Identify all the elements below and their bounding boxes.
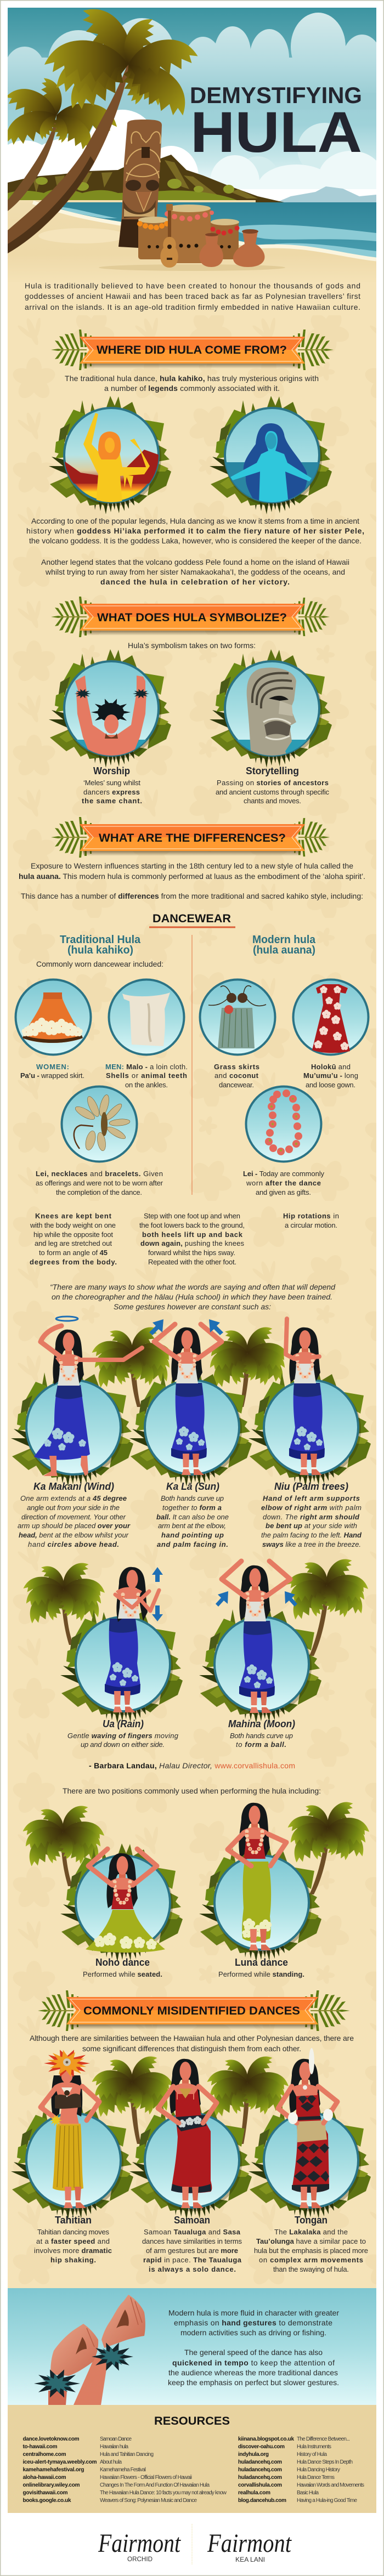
lei caption modern: worn after the dance <box>246 1179 321 1187</box>
arrows: sun gesture <box>149 1319 223 1335</box>
intro paragraph: goddesses of ancient Hawaii and has been traced back as far as Polynesian travellers’ first <box>25 292 360 300</box>
worship caption <box>82 765 142 805</box>
resources list left: books.google.co.uk <box>23 2498 71 2504</box>
distant mountains <box>276 186 376 202</box>
dancewear captions row one <box>20 1063 358 1089</box>
arrows: moon gesture <box>216 1591 297 1607</box>
resources list right: Basic Hula <box>297 2490 319 2496</box>
oval: grass skirt and coconuts <box>200 979 275 1055</box>
dancer: Tongan <box>249 2048 371 2220</box>
resources list right: huladancehq.com <box>238 2475 282 2481</box>
positions intro: There are two positions commonly used when performing the hula including: <box>63 1786 321 1795</box>
tahitian caption: Tahitian dancing moves <box>37 2228 110 2236</box>
lei caption traditional: as offerings and were not to be worn after <box>36 1179 163 1187</box>
resources list left: Hula and Tahitian Dancing <box>100 2452 154 2458</box>
banner: what are the differences <box>51 817 330 858</box>
noho caption: Noho dance <box>95 1957 150 1968</box>
movement column one: degrees from the body. <box>30 1258 117 1266</box>
resources list left: dance.lovetoknow.com <box>23 2436 80 2442</box>
intro paragraph <box>25 281 360 311</box>
wind caption: Ka Makani (Wind) <box>33 1481 114 1492</box>
banner: commonly misidentified dances <box>38 1990 350 2031</box>
quote <box>50 1283 336 1311</box>
dancewear captions row one: and loose gown. <box>306 1081 355 1089</box>
wind caption: One arm extends at a 45 degree <box>20 1494 127 1502</box>
resources heading: RESOURCES <box>154 2415 230 2427</box>
traditional hula heading: (hula kahiko) <box>67 944 133 956</box>
movement column two: the foot lowers back to the ground, <box>139 1221 245 1229</box>
title: HULA <box>190 100 362 164</box>
clay gourds <box>199 229 265 267</box>
legends paragraph two: danced the hula in celebration of her victory. <box>100 577 290 586</box>
large palm tree <box>8 0 200 253</box>
quote: on the choreographer and the hālau (Hula school) in which they have been trained. <box>52 1292 332 1301</box>
samoan caption: is always a solo dance. <box>149 2265 236 2273</box>
misidentified intro text: Although there are similarities between the Hawaiian hula and other Polynesian dances, there are <box>30 2034 354 2042</box>
legends paragraph two <box>41 558 349 586</box>
sun caption: arm bent at the elbow, <box>158 1522 226 1530</box>
dancewear captions row one: Holokū and <box>311 1063 351 1071</box>
worship caption: dancers express <box>83 788 140 796</box>
intro paragraph: Hula is traditionally believed to have been created to honour the thousands of gods and <box>25 281 360 290</box>
beach sand <box>8 202 376 270</box>
sun caption <box>156 1481 229 1548</box>
movement column two: Repeated with the other foot. <box>148 1258 236 1266</box>
resources list right: huladancehq.com <box>238 2467 282 2473</box>
banner: what does hula symbolize: WHAT DOES HULA SYMBOLIZE? <box>97 611 287 624</box>
resources list left: onlinelibrary.wiley.com <box>23 2482 80 2488</box>
banner: where did hula come from <box>51 330 334 370</box>
illustration: hand gestures <box>34 2295 145 2405</box>
oval: worship figure <box>49 649 171 768</box>
dancewear heading: DANCEWEAR <box>153 912 231 925</box>
samoan caption: of arm gestures but are more <box>146 2246 238 2255</box>
banner: what does hula symbolize <box>51 597 330 637</box>
logo divider <box>191 2524 193 2565</box>
lei caption modern: Lei - Today are commonly <box>243 1170 325 1178</box>
traditional hula heading <box>60 934 141 956</box>
lei caption traditional: Lei, necklaces and bracelets. Given <box>36 1170 163 1178</box>
palm trees caption <box>261 1481 362 1548</box>
legends paragraph two: Another legend states that the volcano goddess Pele found a home on the island of Hawaii <box>41 558 349 566</box>
dancewear captions row one: Mu’umu’u - long <box>303 1071 358 1080</box>
luna caption: Performed while standing. <box>218 1970 304 1978</box>
logo: Fairmont Kea Lani: KEA LANI <box>235 2556 265 2563</box>
luna caption <box>218 1957 304 1978</box>
dancewear captions row one: Grass skirts <box>214 1063 259 1071</box>
intro paragraph: arrival on the islands. It is an age-old tradition firmly embedded in native Hawaiian culture. <box>25 303 360 311</box>
resources list left: centralhome.com <box>23 2452 66 2458</box>
palm trees behind positions <box>21 1796 371 1894</box>
movement column three <box>283 1212 339 1229</box>
wind caption: direction of movement. Your other <box>21 1513 126 1521</box>
dancer: Mahina <box>199 1561 321 1723</box>
logo: Fairmont Orchid: ORCHID <box>127 2555 153 2563</box>
resources list left: iceu-alert-tymaya.weebly.com <box>23 2459 97 2465</box>
oval: goddess Laka <box>210 396 332 514</box>
movement column two: both heels lift up and back <box>142 1230 243 1239</box>
worship caption: ‘Meles’ sung whilst <box>83 779 140 787</box>
wind caption <box>18 1481 131 1548</box>
samoan caption: dances have similarities in terms <box>142 2237 242 2245</box>
palm trees behind polynesian dancers <box>91 2051 290 2144</box>
movement column two <box>139 1212 245 1266</box>
dancewear captions row one: Pa’u - wrapped skirt. <box>20 1071 84 1080</box>
diamond head mountain <box>8 155 284 202</box>
storytelling caption: Storytelling <box>246 765 299 776</box>
modern hula text: emphasis on hand gestures to demonstrate <box>174 2318 332 2327</box>
resources list right: Hula Dance Terms <box>297 2475 335 2481</box>
resources list right: realhula.com <box>238 2490 270 2496</box>
misidentified intro text: some significant differences that distinguish them from each other. <box>82 2044 301 2053</box>
oval: holoku dress <box>293 979 369 1055</box>
modern hula text: Modern hula is more fluid in character with greater <box>168 2308 339 2317</box>
modern hula text: modern activities such as driving or fishing. <box>180 2328 326 2337</box>
resources list left: Hawaiian Flowers - Official Flowers of Hawaii <box>100 2475 192 2481</box>
wind caption: head, bent at the elbow whilst your <box>19 1531 129 1539</box>
tongan caption: than the swaying of hula. <box>273 2265 349 2273</box>
misidentified intro text <box>30 2034 354 2053</box>
sun caption: Ka Lā (Sun) <box>166 1481 219 1492</box>
rain caption <box>67 1718 179 1749</box>
differences intro text: hula auana. This modern hula is commonly performed at luaus as the embodiment of the ‘aloha spirit’. <box>19 872 365 881</box>
lei caption modern: and given as gifts. <box>256 1188 311 1196</box>
drums with flower garlands <box>137 205 239 263</box>
resources list right: discover-oahu.com <box>238 2444 285 2450</box>
resources list left: Hawaiian hula <box>100 2444 128 2450</box>
tongan caption: hula but the emphasis is placed more <box>254 2246 368 2255</box>
dancer: Ua <box>60 1567 183 1723</box>
legends paragraph two: whilst trying to run away from her sister Namakaokaha’I, the goddess of the oceans, and <box>45 568 345 576</box>
oval: pau skirt <box>15 979 91 1055</box>
legends paragraph one: the volcano goddess. It is the goddess Laka, however, who is considered the keeper of the dance. <box>29 536 362 545</box>
resources list left: About hula <box>100 2459 122 2465</box>
palm trees behind gesture dancers <box>91 1321 290 1407</box>
panel: modern hula blue band <box>8 2288 376 2405</box>
resources list right: indyhula.org <box>238 2452 269 2458</box>
resources list right: Hawaiian Words and Movements <box>297 2482 364 2488</box>
legends paragraph one <box>26 517 364 545</box>
modern hula text: quickened in tempo to keep the attention of <box>172 2358 335 2367</box>
movement column two: down again, pushing the knees <box>140 1239 245 1247</box>
quote attribution: - Barbara Landau, Halau Director, www.corvallishula.com <box>89 1761 295 1770</box>
movement column three: Hip rotations in <box>283 1212 339 1220</box>
sun caption: Both hands curve up <box>161 1494 224 1502</box>
resources list right: Having a Hula-ing Good Time <box>297 2498 357 2504</box>
worship caption: the same chant. <box>82 797 142 805</box>
resources list left: Weavers of Song: Polynesian Music and Dance <box>100 2498 197 2504</box>
resources list right: corvallishula.com <box>238 2482 282 2488</box>
palm trees caption: sways like a tree in the breeze. <box>262 1540 361 1548</box>
movement column one: and leg are stretched out <box>35 1239 112 1247</box>
dancewear captions row one: on the ankles. <box>125 1081 168 1089</box>
dancewear captions row one: and coconut <box>214 1071 259 1080</box>
worship caption: Worship <box>93 765 130 776</box>
resources list right: Hula Instruments <box>297 2444 331 2450</box>
movement column one: to form an angle of 45 <box>39 1249 108 1257</box>
banner: commonly misidentified dances: COMMONLY MISIDENTIFIED DANCES <box>83 2005 300 2017</box>
resources list left: Changes In The Form And Function Of Hawaiian Hula <box>100 2482 210 2488</box>
tongan caption <box>254 2215 368 2273</box>
tongan caption: Tongan <box>295 2215 327 2226</box>
moon caption: Mahina (Moon) <box>228 1718 295 1729</box>
banner: where did hula come from: WHERE DID HULA COME FROM? <box>97 344 287 356</box>
moon caption: to form a ball. <box>236 1740 286 1749</box>
legends intro text: a number of legends commonly associated with it. <box>104 384 280 393</box>
column divider <box>192 935 193 1195</box>
dancewear captions row one: WOMEN: <box>36 1063 69 1071</box>
oval: flower lei <box>246 1087 321 1161</box>
palm trees caption: be bent up at your side with <box>266 1522 357 1530</box>
storytelling caption <box>216 765 329 805</box>
symbolism intro: Hula’s symbolism takes on two forms: <box>128 641 256 650</box>
dancewear intro: Commonly worn dancewear included: <box>36 960 163 968</box>
samoan caption: Samoan <box>174 2215 210 2226</box>
tiki statue <box>118 120 162 248</box>
movement column one <box>30 1212 117 1266</box>
resources list right <box>238 2436 364 2504</box>
tongan caption: Tau’olunga have a similar pace to <box>256 2237 366 2245</box>
movement column two: forward whilst the hips sway. <box>148 1249 235 1257</box>
differences intro text: Exposure to Western influences starting in the 18th century led to a new style of hula called the <box>31 861 353 870</box>
palm trees caption: down. The right arm should <box>263 1513 360 1521</box>
lei caption traditional <box>36 1170 163 1196</box>
sun caption: together to form a <box>162 1503 222 1512</box>
modern hula text: the audience whereas the more traditional dances <box>168 2368 338 2377</box>
dancer: Noho <box>60 1843 183 1962</box>
dancewear captions row one: MEN: Malo - a loin cloth. <box>105 1063 188 1071</box>
storytelling caption: chants and moves. <box>244 797 301 805</box>
resources list left: kamehamehafestival.org <box>23 2467 84 2473</box>
banner: what are the differences: WHAT ARE THE DIFFERENCES? <box>99 832 286 844</box>
noho caption <box>83 1957 162 1978</box>
hero illustration <box>8 8 376 271</box>
patterned page body <box>8 258 376 2288</box>
legends paragraph one: According to one of the popular legends, Hula dancing as we know it stems from a time in ancient <box>31 517 359 525</box>
modern hula heading <box>252 934 316 956</box>
tahitian caption <box>34 2215 112 2264</box>
palm trees caption: Niu (Palm trees) <box>274 1481 348 1492</box>
arrows: rain up and down <box>152 1567 163 1621</box>
sun caption: ball. It can also be one <box>156 1513 229 1521</box>
title: DEMYSTIFYING <box>190 82 362 108</box>
modern hula text: keep the emphasis on perfect but slower gestures. <box>168 2378 339 2387</box>
differences intro text <box>19 861 365 900</box>
resources list left: to-hawaii.com <box>23 2444 58 2450</box>
oval: goddess Pele <box>49 396 171 514</box>
ukulele <box>160 204 178 268</box>
logo: Fairmont Orchid: Fairmont <box>98 2529 181 2558</box>
dancer: Ka La <box>129 1319 252 1486</box>
tongan caption: The Lakalaka and the <box>274 2228 348 2236</box>
rain caption: Gentle waving of fingers moving <box>67 1732 179 1740</box>
resources list right: blog.dancehub.com <box>238 2498 286 2504</box>
resources list right: History of Hula <box>297 2452 327 2458</box>
resources list left: govisithawaii.com <box>23 2490 68 2496</box>
moon caption: Both hands curve up <box>230 1732 293 1740</box>
palm trees caption: the palm facing to the left. Hand <box>261 1531 362 1539</box>
movement column three: a circular motion. <box>285 1221 337 1229</box>
wind caption: angle out from your side in the <box>27 1503 120 1512</box>
sea and waves <box>33 202 376 271</box>
wind caption: arm up should be placed over your <box>18 1522 131 1530</box>
resources list right: huladancehq.com <box>238 2459 282 2465</box>
modern hula text <box>168 2308 339 2387</box>
samoan caption <box>142 2215 242 2273</box>
differences intro text: This dance has a number of differences from the more traditional and sacred kahiko style, including: <box>21 892 363 900</box>
resources list right: The Difference Between... <box>297 2436 350 2442</box>
resources list left: Kamehameha Festival <box>100 2467 146 2473</box>
resources list right: Hula Dance Steps In Depth <box>297 2459 353 2465</box>
movement column one: hip while the opposite foot <box>33 1230 113 1239</box>
tahitian caption: at a faster speed and <box>36 2237 110 2245</box>
resources list left <box>23 2436 227 2504</box>
modern hula heading: (hula auana) <box>253 944 315 956</box>
resources list left: Samoan Dance <box>100 2436 132 2442</box>
arrow: wind circling <box>56 1317 78 1321</box>
oval: malo loin cloth <box>109 979 184 1055</box>
tongan caption: on complex arm movements <box>259 2256 363 2264</box>
dancer: Niu <box>249 1319 371 1486</box>
samoan caption: Samoan Taualuga and Sasa <box>144 2228 241 2236</box>
movement column one: Knees are kept bent <box>35 1212 112 1220</box>
lei caption modern <box>243 1170 325 1196</box>
dancer: Samoan <box>129 2059 252 2220</box>
storytelling caption: and ancient customs through specific <box>216 788 329 796</box>
sun caption: and palm facing in. <box>157 1540 228 1548</box>
dancewear captions row one: dancewear. <box>219 1081 254 1089</box>
modern hula text: The general speed of the dance has also <box>184 2348 323 2357</box>
legends intro text <box>65 374 319 393</box>
luna caption: Luna dance <box>235 1957 288 1968</box>
palm trees caption: Hand of left arm supports <box>263 1494 360 1502</box>
palm trees caption: elbow of right arm with palm <box>261 1503 362 1512</box>
oval: feather lei <box>61 1087 137 1161</box>
traditional hula heading: Traditional Hula <box>60 934 141 946</box>
noho caption: Performed while seated. <box>83 1970 162 1978</box>
resources list right: Hula Dancing History <box>297 2467 340 2473</box>
movement column two: Step with one foot up and when <box>144 1212 240 1220</box>
oval: storytelling tiki <box>210 649 332 768</box>
legends intro text: The traditional hula dance, hula kahiko, has truly mysterious origins with <box>65 374 319 383</box>
rain caption: up and down on either side. <box>81 1740 165 1749</box>
moon caption <box>228 1718 295 1749</box>
movement column one: with the body weight on one <box>30 1221 116 1229</box>
resources list right: kiinana.blogspot.co.uk <box>238 2436 294 2442</box>
tahitian caption: Tahitian <box>55 2215 92 2226</box>
palm trees behind rain and moon <box>22 1553 370 1656</box>
rain caption: Ua (Rain) <box>103 1718 144 1729</box>
modern hula heading: Modern hula <box>252 934 316 946</box>
dancer: Tahitian <box>11 2047 133 2220</box>
storytelling caption: Passing on stories of ancestors <box>217 779 329 787</box>
wind caption: hand circles above head. <box>28 1540 119 1548</box>
dancer: Luna <box>199 1803 321 1962</box>
tahitian caption: hip shaking. <box>50 2256 96 2264</box>
quote: Some gestures however are constant such as: <box>114 1302 271 1311</box>
legends paragraph one: history when goddess Hi’iaka performed it to calm the fiery nature of her sister Pele, <box>26 526 364 535</box>
sun caption: hand pointing up <box>161 1531 224 1539</box>
dancewear captions row one: Shells or animal teeth <box>106 1071 187 1080</box>
dancer: Ka Makani <box>11 1317 142 1486</box>
resources list left: The Hawaiian Hula Dance: 10 facts you may not already know <box>100 2490 227 2496</box>
samoan caption: rapid in pace. The Taualuga <box>143 2256 242 2264</box>
quote: “There are many ways to show what the words are saying and often that will depend <box>50 1283 336 1291</box>
resources list left: aloha-hawaii.com <box>23 2475 66 2481</box>
logo: Fairmont Kea Lani: Fairmont <box>207 2529 292 2558</box>
lei caption traditional: the completion of the dance. <box>56 1188 142 1196</box>
panel: resources <box>8 2405 376 2513</box>
small palm tree <box>8 78 117 211</box>
tahitian caption: involves more dramatic <box>34 2246 112 2255</box>
